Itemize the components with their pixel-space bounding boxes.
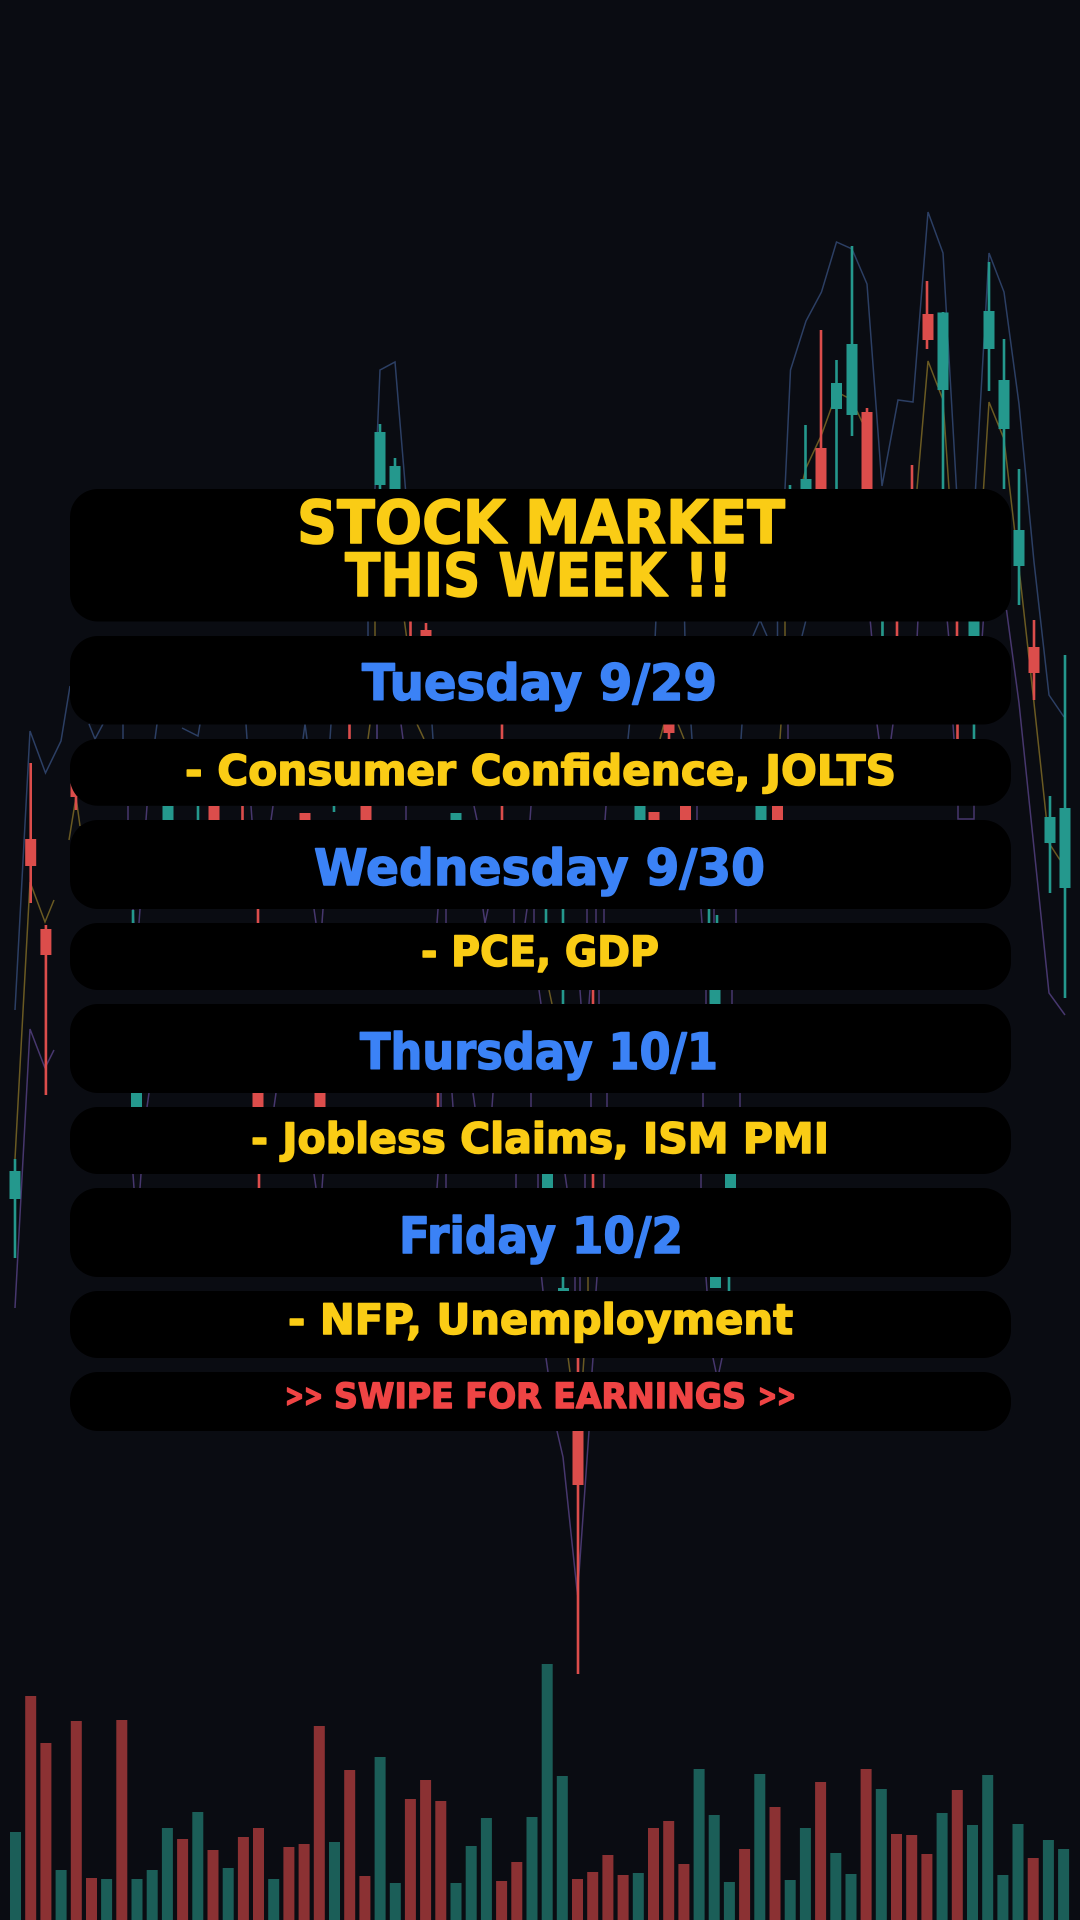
chart: candlestick wicks	[15, 246, 1065, 1674]
chart: volume bars teal	[16, 1664, 1064, 1920]
heading: this week: THIS WEEK !!	[345, 541, 732, 611]
panel: wednesday	[70, 820, 1011, 909]
panel: wednesday: Wednesday 9/30	[314, 839, 765, 897]
panel: tuesday events: - Consumer Confidence, JOLTS	[185, 746, 896, 795]
chart: volume bars red	[31, 1696, 1033, 1920]
panel: wednesday events	[70, 923, 1011, 990]
panel: swipe call to action	[70, 1372, 1011, 1431]
panel: friday events	[70, 1291, 1011, 1358]
heading: stock market: STOCK MARKET	[297, 488, 785, 558]
panel: swipe call to action: SWIPE FOR EARNINGS	[334, 1377, 746, 1417]
panel: tuesday: Tuesday 9/29	[362, 654, 717, 712]
panel: tuesday events	[70, 739, 1011, 806]
panel: thursday events	[70, 1107, 1011, 1174]
panel: swipe call to action: >>	[285, 1379, 323, 1414]
panel: friday events: - NFP, Unemployment	[288, 1295, 793, 1344]
chart: price bands and moving average lines	[15, 212, 1065, 1595]
chart: candlestick bodies	[15, 311, 1065, 1485]
panel: swipe call to action: >>	[758, 1379, 796, 1414]
panel: title	[70, 488, 1011, 622]
panel: wednesday events: - PCE, GDP	[421, 927, 659, 976]
panel: thursday: Thursday 10/1	[360, 1023, 718, 1081]
panel: thursday	[70, 1004, 1011, 1093]
panel: friday	[70, 1188, 1011, 1277]
panel: friday: Friday 10/2	[399, 1207, 683, 1265]
panel: tuesday	[70, 636, 1011, 724]
panel: thursday events: - Jobless Claims, ISM PMI	[251, 1114, 829, 1163]
